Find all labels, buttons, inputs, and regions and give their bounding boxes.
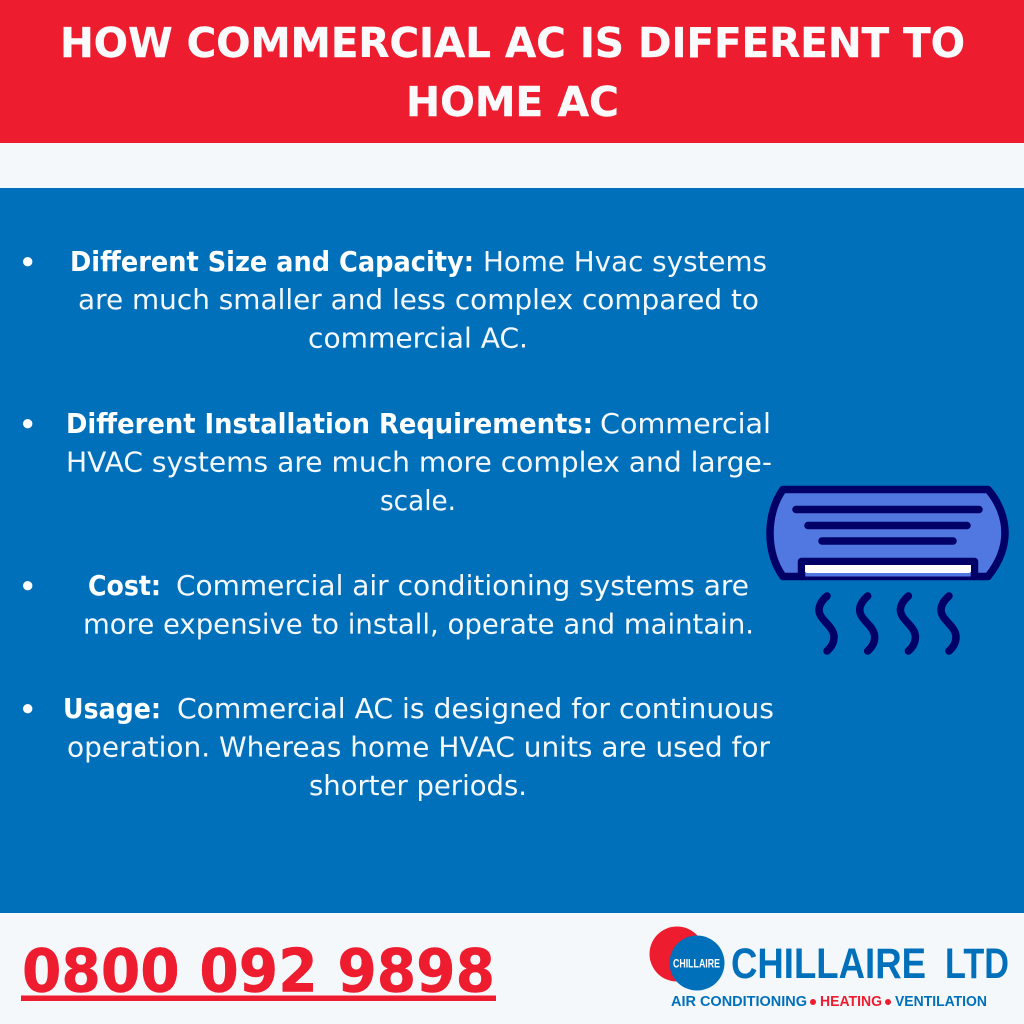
bullet: usage (23, 693, 774, 802)
bullet: cost: Cost: (88, 570, 161, 602)
bullet: cost (23, 570, 754, 640)
title banner: HOME AC (406, 78, 619, 126)
title banner: HOW COMMERCIAL AC IS DIFFERENT TO (60, 19, 965, 67)
logo: Chillaire Ltd: AIR CONDITIONING (671, 994, 807, 1010)
logo: Chillaire Ltd: CHILLAIRE (673, 956, 720, 970)
bullet: usage: shorter periods. (309, 770, 527, 802)
bullet: usage: Usage: (63, 693, 161, 725)
bullet: different installation requirements: Commercial (600, 408, 771, 440)
bullet: different installation requirements: HVAC systems are much more complex and large- (66, 446, 772, 478)
bullet: usage: operation. Whereas home HVAC units are used for (67, 732, 771, 764)
bullet: different size and capacity: Home Hvac systems (483, 246, 767, 278)
bullet: different size and capacity: Different Size and Capacity: (70, 246, 474, 278)
logo: Chillaire Ltd (650, 926, 1009, 1010)
logo: Chillaire Ltd: LTD (945, 940, 1009, 988)
icon: air conditioner (770, 490, 1005, 651)
bullet: cost: more expensive to install, operate and maintain. (83, 608, 754, 640)
logo: Chillaire Ltd: CHILLAIRE (731, 940, 926, 988)
bullet: cost: Commercial air conditioning systems are (176, 570, 749, 602)
bullet: different installation requirements: Different Installation Requirements: (66, 408, 593, 440)
bullet: different size and capacity (23, 246, 767, 354)
logo: Chillaire Ltd: HEATING (820, 994, 882, 1010)
bullet: different size and capacity: commercial AC. (308, 322, 528, 354)
bullet: usage: Commercial AC is designed for continuous (177, 693, 774, 725)
bullet: different installation requirements: scale. (380, 485, 456, 517)
phone number: 0800 092 9898 (22, 936, 495, 1006)
title banner (0, 0, 1024, 143)
bullet: different size and capacity: are much smaller and less complex compared to (78, 284, 759, 316)
bullet: different installation requirements (23, 408, 772, 517)
panel: blue content area (0, 188, 1024, 913)
logo: Chillaire Ltd: VENTILATION (895, 994, 987, 1010)
